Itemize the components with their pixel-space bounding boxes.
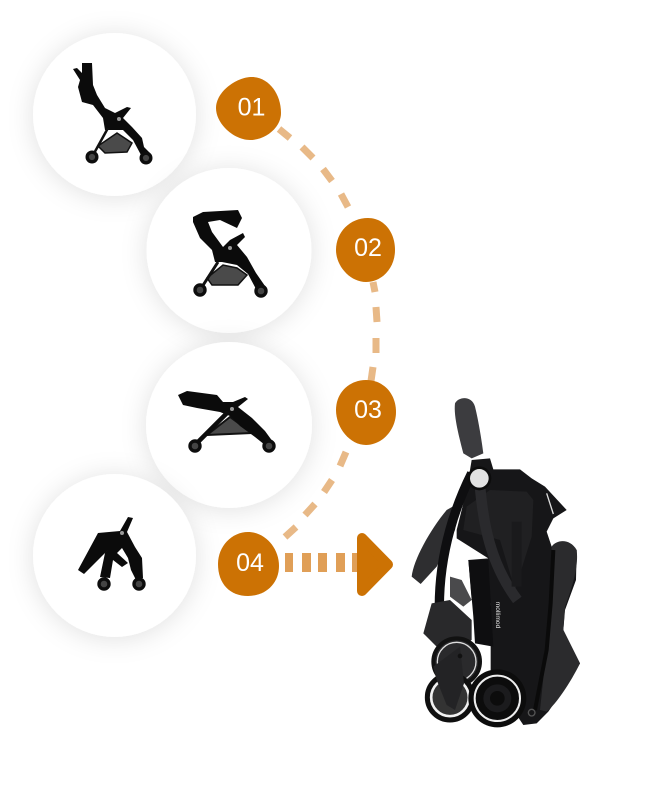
- step 1 circle: [33, 33, 196, 196]
- handlebar grip: [455, 398, 483, 458]
- badge 02: 02: [354, 234, 382, 262]
- hinge hub: [467, 466, 491, 490]
- icon: stroller upright: [73, 63, 151, 163]
- dashed curved path: [279, 129, 377, 537]
- step 4 circle: [33, 474, 196, 637]
- step 3 circle: [146, 342, 312, 508]
- back wheel lower: [427, 675, 473, 720]
- rear foot pivot: [528, 709, 535, 716]
- wheel bracket: [433, 647, 464, 710]
- badge 03: 03: [354, 396, 382, 424]
- main body silhouette: [457, 458, 580, 725]
- badge 01: [216, 77, 281, 140]
- folded mesh centre: [468, 560, 493, 647]
- icon: stroller half folded: [193, 210, 266, 296]
- icon: stroller flat: [178, 391, 274, 451]
- rear frame tube: [439, 473, 472, 607]
- back wheel upper: [433, 638, 480, 685]
- badge 04: [218, 532, 279, 596]
- badge 01: 01: [238, 94, 265, 122]
- step 2 panel: [146, 168, 312, 333]
- harness buckle straps: [547, 493, 553, 514]
- step 1 panel: [33, 33, 196, 196]
- brand text on frame: mollimod: [494, 602, 501, 629]
- rear cushion panel: [540, 541, 580, 712]
- main front tube: [480, 487, 517, 600]
- front wheel: [468, 669, 526, 727]
- folded stroller photo: [412, 398, 580, 727]
- seat back panel: [463, 490, 533, 590]
- footrest pad: [412, 503, 458, 584]
- badge 04: 04: [236, 549, 264, 577]
- icon: stroller collapsing: [78, 517, 144, 589]
- badge 03: [336, 380, 396, 445]
- step 3 panel: [146, 342, 312, 508]
- step 4 panel: [33, 474, 196, 637]
- step 2 circle: [146, 168, 312, 333]
- lower bracket: [423, 600, 472, 653]
- arrow: dashed arrow to folded stroller: [285, 538, 388, 591]
- badge 02: [336, 218, 395, 282]
